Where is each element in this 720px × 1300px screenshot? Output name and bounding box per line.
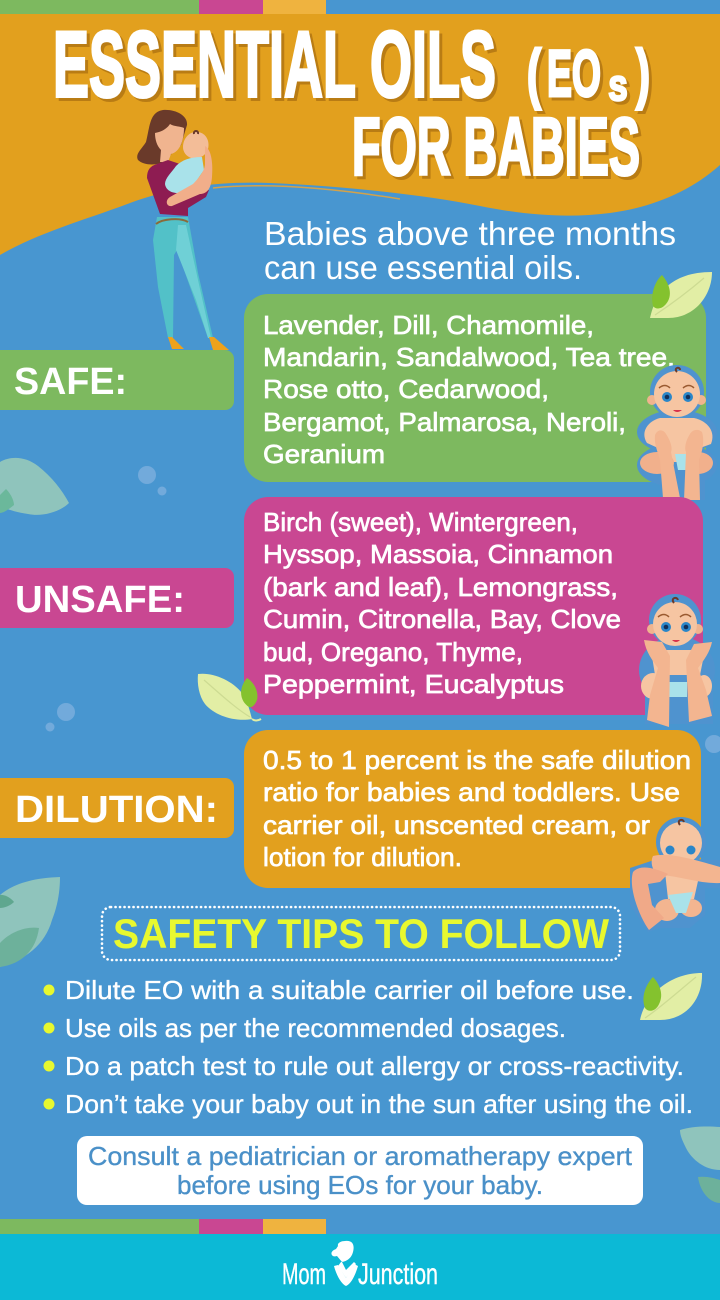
panel: unsafe bbox=[244, 497, 703, 715]
title: ( bbox=[530, 39, 544, 113]
safe oils list: Mandarin, Sandalwood, Tea tree. bbox=[263, 342, 675, 372]
illustration: baby on unsafe panel bbox=[639, 594, 715, 727]
leaf: lower left bbox=[0, 877, 60, 967]
intro text bbox=[264, 215, 676, 286]
callout: consult: Consult a pediatrician or aromatherapy expert bbox=[88, 1141, 633, 1171]
dilution text: carrier oil, unscented cream, or bbox=[263, 810, 650, 840]
logo: MomJunction: Junction bbox=[358, 1258, 438, 1291]
tip 1: Dilute EO with a suitable carrier oil before use. bbox=[65, 975, 634, 1005]
safety tips heading: SAFETY TIPS TO FOLLOW bbox=[113, 910, 609, 957]
safe panel background bbox=[244, 294, 706, 482]
safe oils list: Lavender, Dill, Chamomile, bbox=[263, 310, 594, 340]
tip 3: Do a patch test to rule out allergy or cross-reactivity. bbox=[65, 1051, 684, 1081]
intro text: Babies above three months bbox=[264, 215, 676, 252]
label: safe: SAFE: bbox=[14, 361, 127, 403]
label: safe bbox=[0, 350, 234, 410]
title: EO bbox=[550, 39, 604, 113]
leaf: lower right bbox=[680, 1126, 720, 1203]
dilution text: ratio for babies and toddlers. Use bbox=[263, 777, 680, 807]
title bbox=[53, 12, 653, 196]
tip 2: Use oils as per the recommended dosages. bbox=[65, 1013, 566, 1043]
label: unsafe: UNSAFE: bbox=[15, 579, 185, 621]
leaf: upper left bbox=[0, 458, 69, 515]
unsafe oils list: (bark and leaf), Lemongrass, bbox=[263, 572, 618, 602]
title: ) bbox=[636, 36, 650, 110]
intro text: can use essential oils. bbox=[264, 249, 582, 286]
icon: leaf on unsafe panel bbox=[198, 674, 261, 720]
dilution text bbox=[263, 745, 691, 872]
dilution text: 0.5 to 1 percent is the safe dilution bbox=[263, 745, 691, 775]
label: dilution bbox=[0, 778, 234, 838]
callout: consult: before using EOs for your baby. bbox=[177, 1170, 543, 1200]
footer band bbox=[0, 1234, 720, 1300]
unsafe oils list: Birch (sweet), Wintergreen, bbox=[263, 507, 578, 537]
illustration: baby on safe panel bbox=[637, 365, 717, 500]
title: S bbox=[612, 73, 630, 110]
unsafe oils list: Cumin, Citronella, Bay, Clove bbox=[263, 604, 621, 634]
callout: consult bbox=[77, 1136, 643, 1205]
unsafe panel background bbox=[244, 497, 703, 715]
illustration: mother holding baby bbox=[137, 110, 229, 350]
header orange wave background bbox=[0, 14, 720, 255]
bottom colour strip bbox=[0, 1219, 326, 1234]
safe oils list: Geranium bbox=[263, 439, 385, 469]
unsafe oils list bbox=[263, 507, 621, 699]
title: ) bbox=[639, 39, 653, 113]
title: EO bbox=[547, 36, 601, 110]
panel: dilution bbox=[244, 730, 701, 888]
unsafe oils list: bud, Oregano, Thyme, bbox=[263, 637, 523, 667]
leaf: tips section right bbox=[640, 973, 702, 1020]
label: dilution: DILUTION: bbox=[15, 789, 218, 831]
illustration: baby on dilution panel bbox=[630, 817, 720, 932]
bubbles bbox=[46, 466, 720, 753]
safe oils list bbox=[263, 310, 675, 469]
logo: MomJunction: Mom bbox=[282, 1258, 326, 1291]
label: unsafe bbox=[0, 568, 234, 628]
safe oils list: Rose otto, Cedarwood, bbox=[263, 374, 549, 404]
top colour strip bbox=[0, 0, 720, 14]
title: S bbox=[609, 70, 627, 107]
panel: safe bbox=[244, 294, 706, 482]
dilution panel background bbox=[244, 730, 701, 888]
icon: leaf on safe panel bbox=[650, 272, 712, 318]
tip 4: Don’t take your baby out in the sun after using the oil. bbox=[65, 1089, 693, 1119]
unsafe oils list: Hyssop, Massoia, Cinnamon bbox=[263, 539, 613, 569]
safe oils list: Bergamot, Palmarosa, Neroli, bbox=[263, 407, 626, 437]
title: ( bbox=[527, 36, 541, 110]
dilution text: lotion for dilution. bbox=[263, 842, 462, 872]
logo: MomJunction bbox=[282, 1241, 438, 1291]
decorative leaves and bubbles bbox=[0, 458, 720, 1203]
panel: safety tips bbox=[44, 907, 693, 1119]
unsafe oils list: Peppermint, Eucalyptus bbox=[263, 669, 564, 699]
